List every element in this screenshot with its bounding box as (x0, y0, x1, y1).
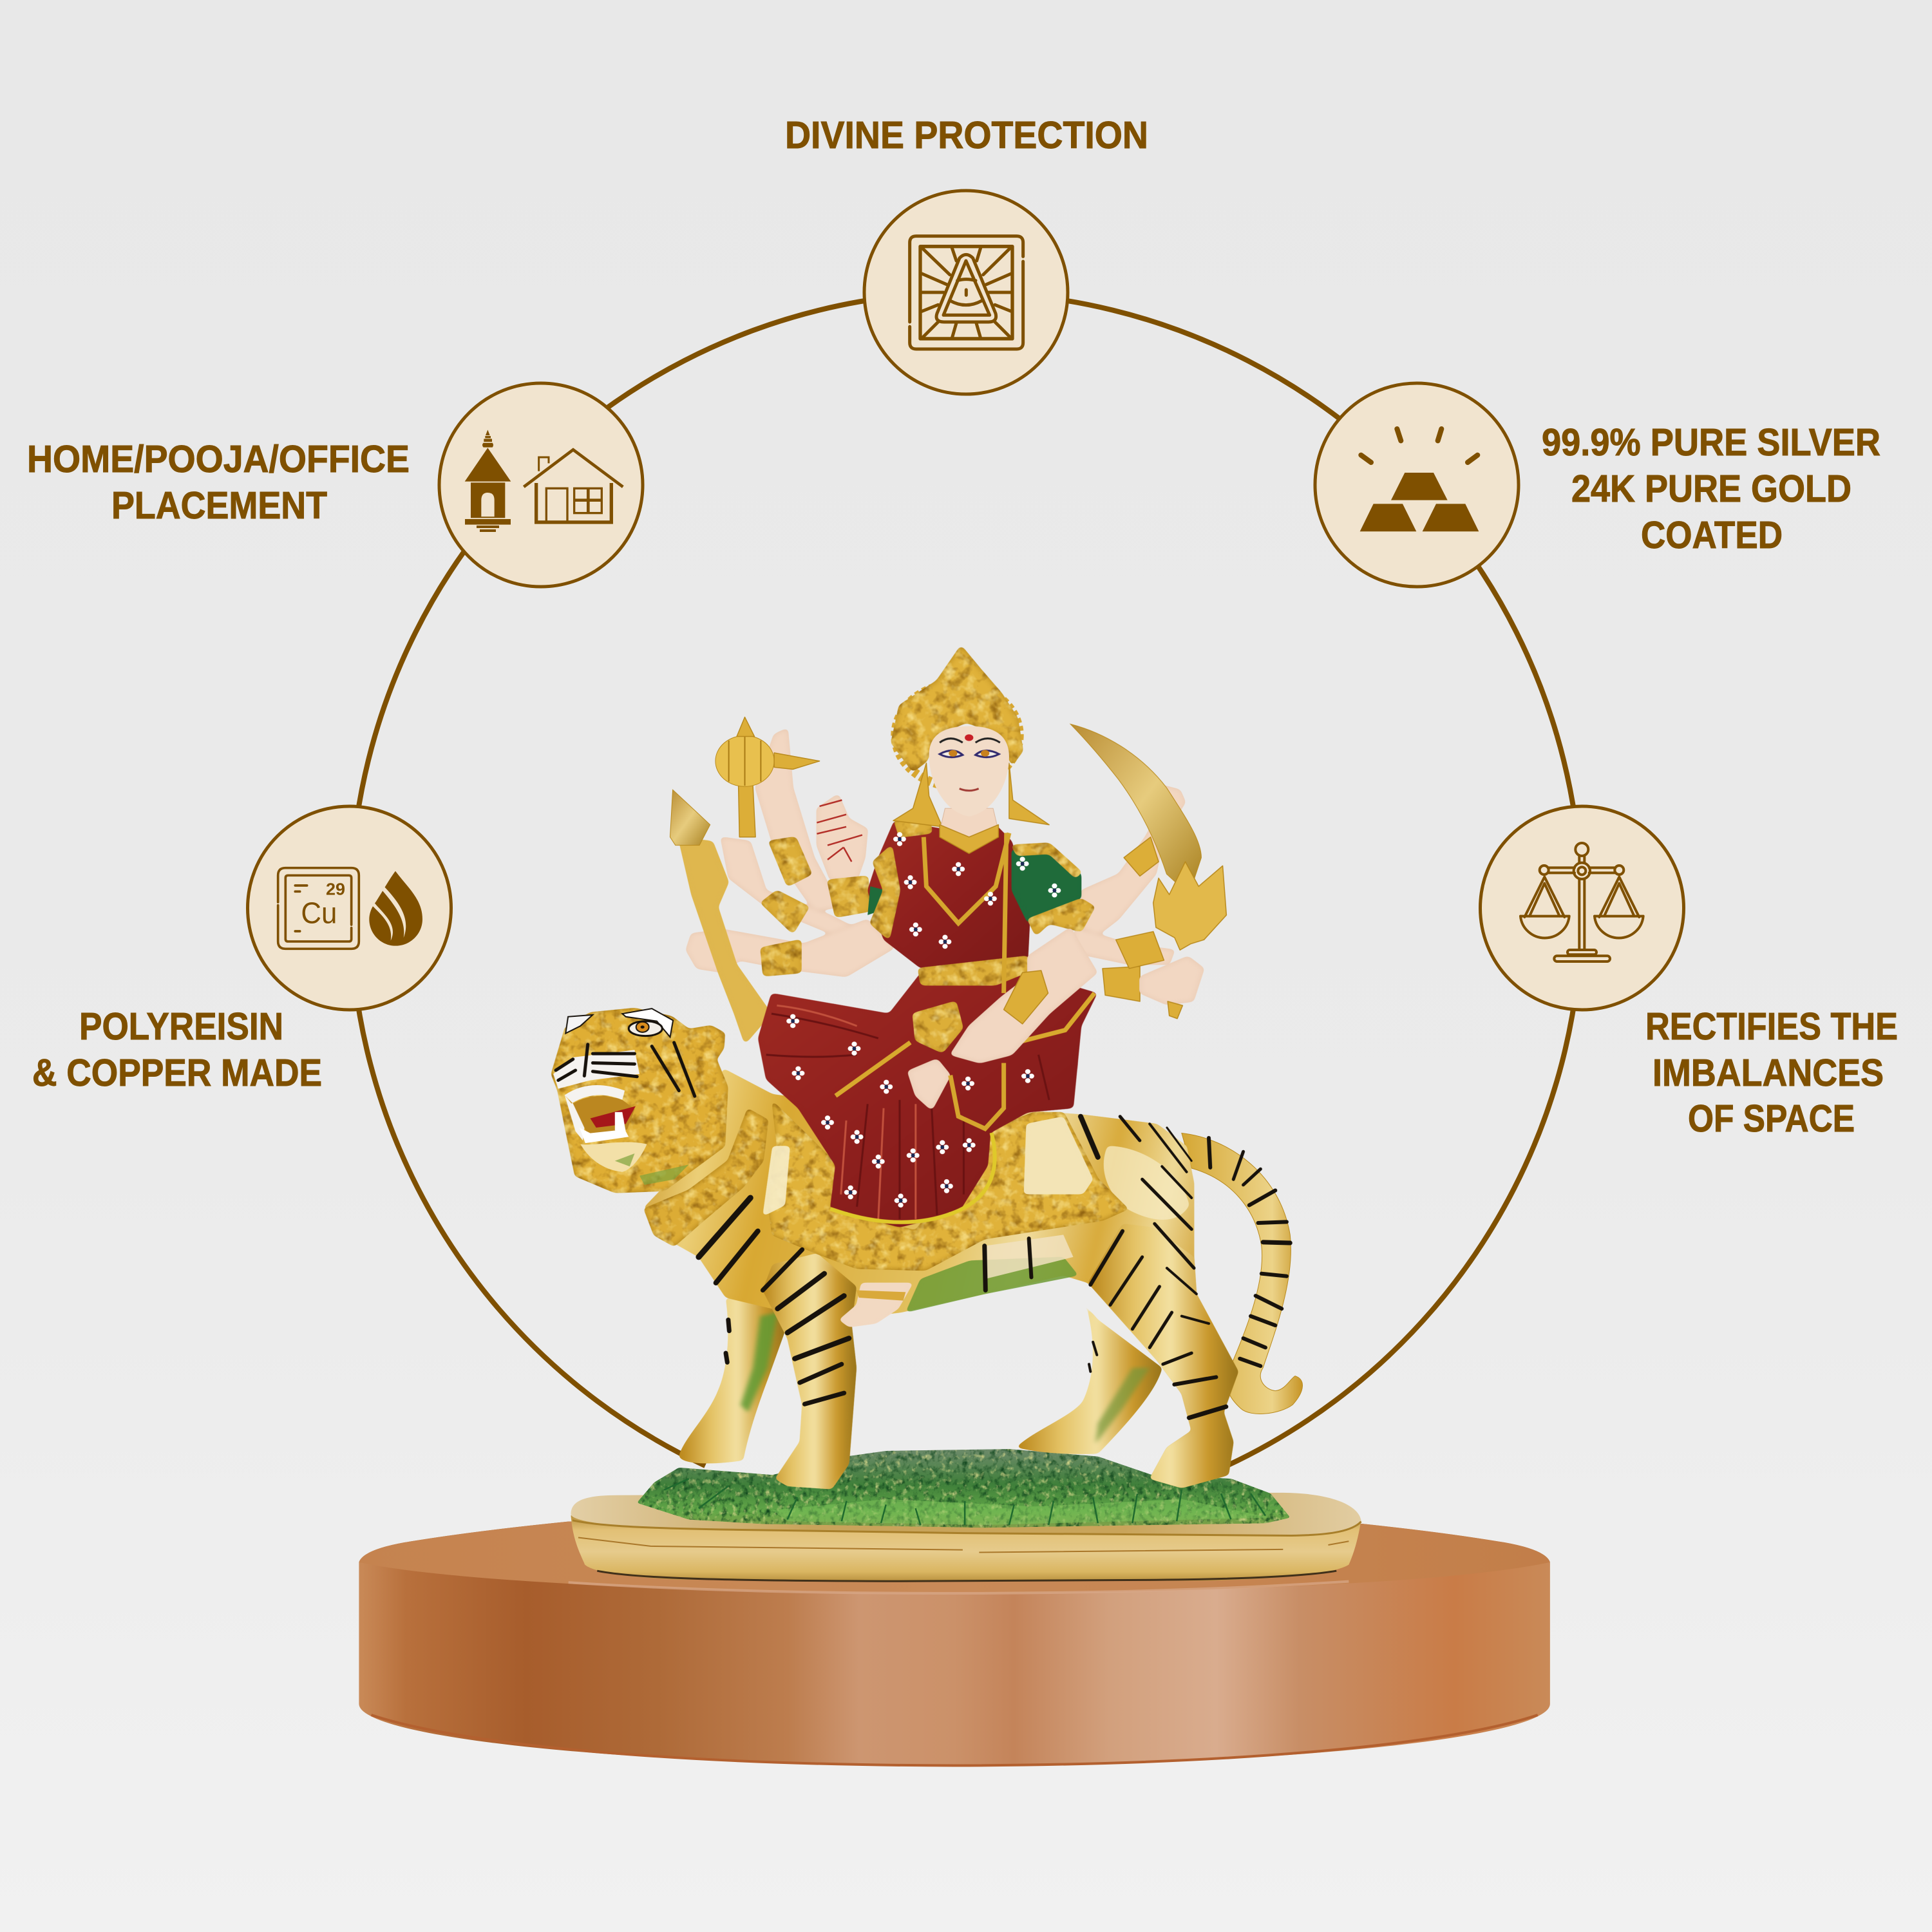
circle badge: copper (247, 806, 451, 1010)
goddess figure (670, 646, 1226, 1227)
ring connecting the feature circles (350, 292, 1582, 1466)
arm with gripping fist (686, 919, 895, 977)
tiger saddle cloth (768, 1102, 1128, 1270)
icon: temple and house (465, 430, 623, 532)
trident (1153, 862, 1226, 950)
skirt folds (766, 1014, 1049, 1219)
necklace gold collar (940, 825, 998, 853)
skirt (758, 972, 1097, 1227)
feature: divine protection (785, 114, 1148, 394)
necklace chains (923, 833, 1009, 993)
icon: copper element tile and resin drop: 29 (326, 879, 345, 898)
tiger and grass (552, 1009, 1302, 1528)
feature: pure silver and gold coated (1315, 383, 1880, 587)
heading: polyreisin and copper made (32, 1005, 322, 1094)
haunch highlight (1104, 1146, 1189, 1220)
tiger near hind leg (1088, 1224, 1238, 1488)
heading: pure silver and gold coated: 24K PURE GOLD (1571, 468, 1852, 510)
torso (867, 820, 1030, 969)
green blouse sleeves (1012, 846, 1081, 923)
icon: copper element tile and resin drop (278, 868, 422, 949)
gold plinth base (571, 1493, 1361, 1582)
copper cylindrical pedestal (359, 1516, 1550, 1766)
circle badge: balance (1480, 806, 1683, 1010)
feature: rectifies the imbalances of space (1480, 806, 1898, 1140)
crown halo (895, 684, 1019, 786)
heading: home pooja office placement: HOME/POOJA/OFFICE (27, 438, 410, 480)
weapon: spear (670, 790, 772, 1045)
heading: home pooja office placement: PLACEMENT (111, 484, 327, 527)
eyebrows (940, 739, 1000, 743)
arm raised holding sword (1081, 784, 1186, 936)
heading: home pooja office placement (27, 438, 410, 527)
heading: rectifies the imbalances of space (1645, 1005, 1898, 1140)
icon: shining gold bars (1360, 429, 1479, 531)
circle badge: placement (439, 383, 643, 587)
heading: polyreisin and copper made: & COPPER MADE (32, 1052, 322, 1094)
durga statue on tiger (552, 646, 1361, 1582)
lips (960, 789, 979, 791)
crown (892, 646, 1023, 772)
hair and veil (893, 763, 1049, 827)
tiger head (552, 1009, 727, 1192)
circle badge: gold (1315, 383, 1519, 587)
front arm and hands (907, 837, 1204, 1110)
skirt highlight (777, 1005, 916, 1219)
saddle pale panel (1024, 1117, 1093, 1194)
heading: rectifies the imbalances of space: OF SPACE (1688, 1097, 1855, 1140)
skirt yellow hem (830, 1133, 995, 1222)
tiger stripes (699, 1117, 1290, 1417)
arm holding mace (755, 728, 841, 911)
gold sash on skirt (835, 993, 1095, 1096)
icon: balance scale (1520, 843, 1643, 961)
feature: polyreisin and copper made (32, 806, 451, 1094)
back arms (686, 728, 1186, 977)
tiger body (645, 1068, 1238, 1488)
circle badge: divine protection (864, 191, 1068, 394)
heading: rectifies the imbalances of space: IMBALANCES (1653, 1052, 1884, 1094)
belly highlight (985, 1235, 1074, 1279)
heading: pure silver and gold coated: COATED (1641, 514, 1783, 556)
heading: pure silver and gold coated (1542, 421, 1880, 556)
trident tip (1168, 1001, 1182, 1019)
tiger paw on near leg and foot (839, 1283, 913, 1327)
heading: pure silver and gold coated: 99.9% PURE SILVER (1542, 421, 1880, 464)
grass mound (637, 1449, 1290, 1528)
icon: all-seeing eye pyramid (910, 236, 1023, 349)
heading: rectifies the imbalances of space: RECTIFIES THE (1645, 1005, 1898, 1048)
head and crown (892, 646, 1049, 853)
tiger collar (645, 1109, 768, 1246)
tiger far legs (679, 1279, 1162, 1463)
heading: polyreisin and copper made: POLYREISIN (79, 1005, 283, 1048)
feature: home pooja office placement (27, 383, 643, 587)
lower left arm holding hand (721, 837, 878, 940)
sword (1070, 724, 1201, 895)
eyes (940, 750, 999, 757)
bindi (965, 734, 973, 741)
arm holding trident (1070, 927, 1175, 964)
green belly reflection (905, 1257, 1078, 1312)
green sleeve left (867, 886, 892, 915)
gold jewel on knee (913, 1001, 963, 1053)
tiger tail (1182, 1133, 1302, 1414)
gold blouse trim and belt (870, 812, 1095, 985)
heading: divine protection: DIVINE PROTECTION (785, 114, 1148, 156)
draped chain at lap (951, 1063, 1004, 1129)
left weapons (670, 717, 820, 1045)
shoulder highlight (762, 1146, 790, 1217)
neck (940, 808, 998, 841)
weapon: mace (715, 717, 820, 837)
icon: copper element tile and resin drop: Cu (301, 896, 337, 929)
left arm bangles (761, 837, 811, 976)
raised open hand with bracelet (817, 794, 870, 917)
face (929, 726, 1009, 817)
dress flower dots (786, 832, 1061, 1208)
tiger near front leg (762, 1253, 857, 1489)
